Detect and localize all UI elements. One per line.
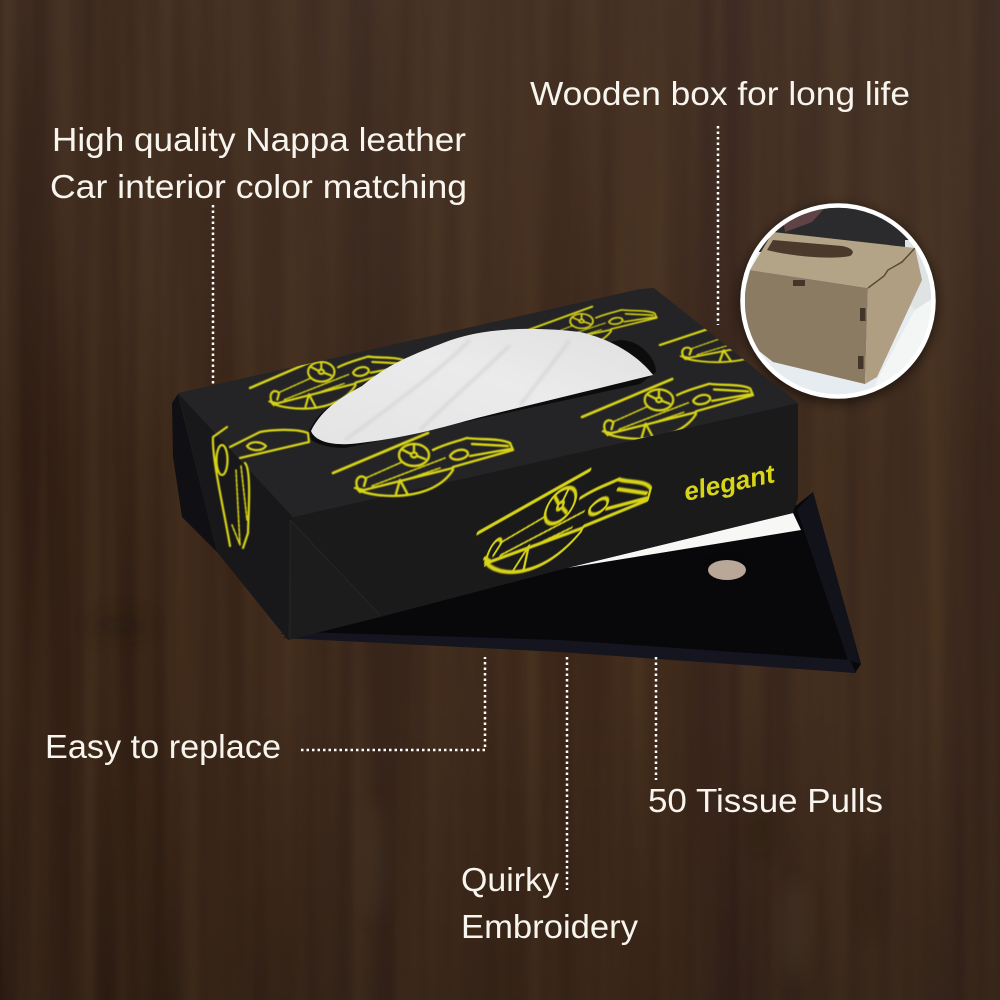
left side face — [178, 393, 293, 640]
heading: nappa leather: High quality Nappa leather — [52, 122, 466, 159]
base plate — [280, 492, 861, 673]
inset: wooden box photo — [738, 200, 945, 404]
embroidery: corner car — [213, 427, 309, 548]
label: tissue pulls: 50 Tissue Pulls — [648, 783, 883, 820]
dotted leader: tissue pulls — [655, 657, 657, 780]
top face — [178, 288, 798, 517]
embroidery: center car — [333, 433, 513, 496]
dotted leader: embroidery — [566, 657, 568, 890]
white paper sheet — [567, 513, 801, 568]
label: easy to replace: Easy to replace — [45, 729, 281, 766]
label: quirky embroidery — [461, 862, 638, 946]
label: quirky embroidery: Quirky — [461, 862, 559, 899]
front face — [288, 403, 798, 640]
tissue box — [172, 288, 831, 640]
left side tail — [172, 394, 217, 552]
heading: nappa leather — [50, 122, 467, 206]
heading: wooden box: Wooden box for long life — [530, 76, 910, 113]
logo: elegant — [681, 458, 779, 507]
slot shadow — [308, 340, 656, 448]
label: quirky embroidery: Embroidery — [461, 909, 638, 946]
finger hole — [704, 551, 750, 580]
embroidery: car on the front — [460, 468, 661, 575]
folded corner flap — [288, 520, 380, 640]
heading: nappa leather: Car interior color matching — [50, 169, 467, 206]
dotted leader: leather — [212, 205, 214, 402]
embroidery: cars on the top — [248, 305, 755, 440]
dotted leader: wooden box — [717, 126, 719, 325]
tissue — [311, 329, 653, 444]
dotted leader: easy to replace — [301, 657, 485, 750]
